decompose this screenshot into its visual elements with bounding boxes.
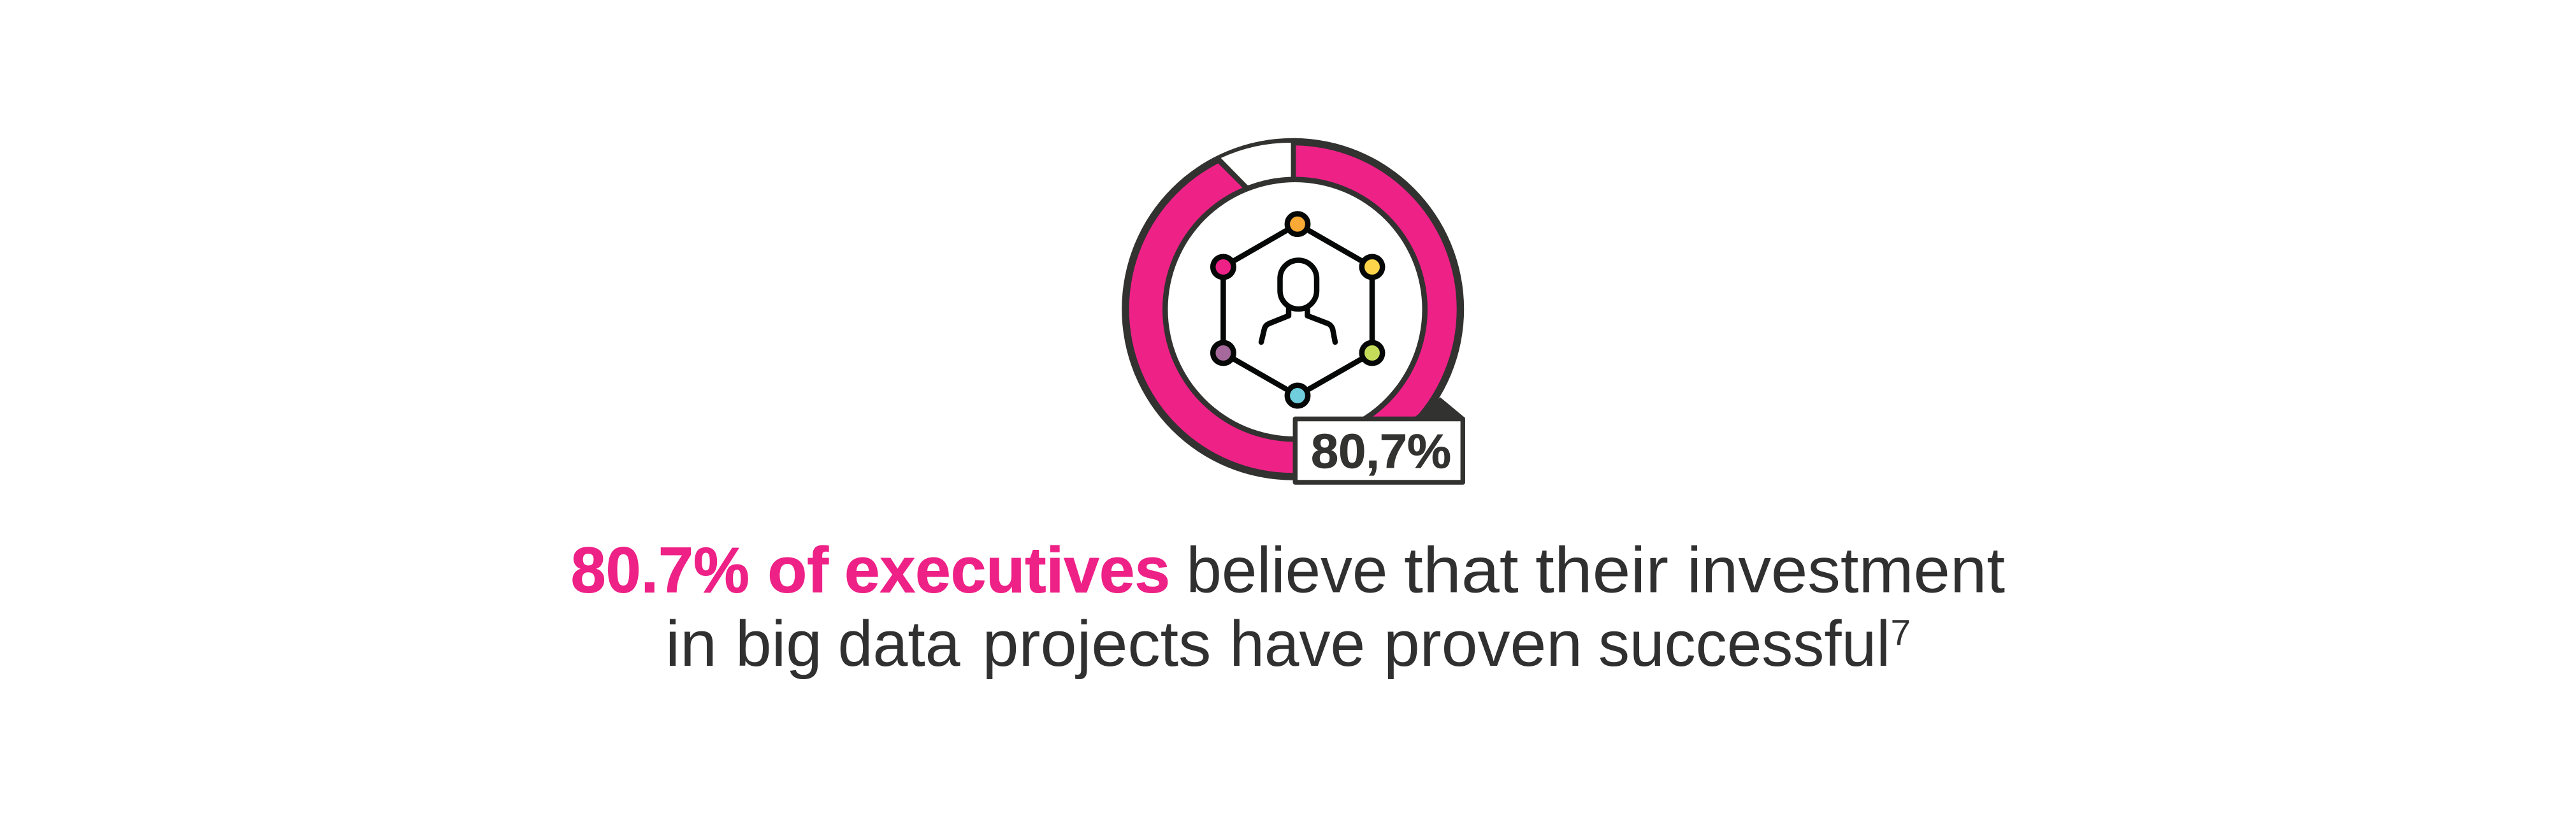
node: cyan [1287, 385, 1308, 406]
node: lime [1362, 343, 1382, 363]
icon: network hexagon with person [1213, 214, 1382, 406]
callout pointer triangle [1414, 398, 1465, 418]
hexagon connection lines [1223, 224, 1372, 396]
caption line 2: successful [1598, 608, 1890, 680]
donut white remainder segment [1221, 143, 1291, 185]
person right shoulder [1308, 309, 1335, 342]
caption bold highlight: 80.7% [571, 535, 749, 607]
callout value: 80,7% [1311, 425, 1451, 479]
person left shoulder [1261, 309, 1289, 342]
caption bold highlight [571, 535, 1170, 607]
donut inner circle outline [1162, 177, 1428, 442]
callout value box [1295, 419, 1463, 482]
donut chart with network icon [1122, 138, 1465, 482]
caption bold highlight: of [767, 535, 829, 607]
caption line 1: their [1535, 535, 1668, 607]
caption bold highlight: executives [844, 535, 1170, 607]
donut pink segment: 80.7% [1129, 145, 1457, 473]
caption line 2: big [735, 608, 822, 680]
caption line 1: investment [1687, 535, 2005, 607]
segment dividers [1215, 142, 1296, 194]
node: purple [1213, 343, 1234, 363]
caption line 2: in [665, 608, 717, 680]
donut inner white circle [1168, 182, 1422, 436]
caption line 1: that [1404, 535, 1519, 607]
icon: person [1261, 260, 1335, 342]
caption line 2: projects [982, 608, 1211, 680]
node: pink [1213, 257, 1234, 277]
caption line 2 [665, 608, 1890, 680]
caption line 2: data [838, 608, 960, 680]
caption line 2: have [1229, 608, 1365, 680]
callout box border [1295, 419, 1463, 482]
caption line 2: proven [1384, 608, 1582, 680]
caption text [571, 535, 2005, 680]
caption line 1: believe [1186, 535, 1387, 607]
node: yellow [1362, 257, 1382, 277]
node: orange [1287, 214, 1308, 234]
footnote marker: 7 [1890, 613, 1911, 654]
caption line 1 [1186, 535, 2005, 607]
donut outer ring outline [1122, 138, 1464, 480]
person head [1280, 260, 1317, 309]
